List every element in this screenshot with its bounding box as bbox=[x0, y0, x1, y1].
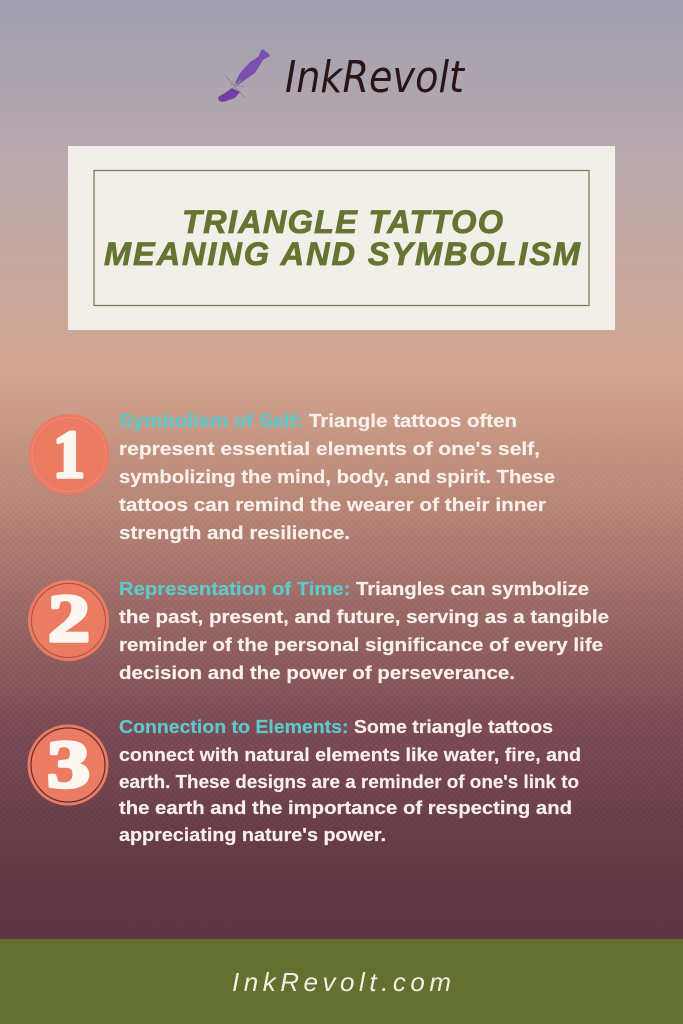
footer band bbox=[0, 939, 683, 1024]
number badge 3 bbox=[28, 724, 108, 806]
number badge 2 bbox=[28, 580, 109, 661]
text block 2: reminder of the personal significance of every life bbox=[119, 635, 603, 655]
text block 3: earth. These designs are a reminder of one's link to bbox=[119, 772, 579, 792]
text block 2 bbox=[119, 579, 609, 683]
icon: purple ink brush bbox=[218, 49, 270, 102]
footer text: InkRevolt.com bbox=[232, 967, 451, 997]
logo bbox=[218, 49, 466, 103]
text block 1: symbolizing the mind, body, and spirit. These bbox=[119, 467, 555, 487]
item 2 bbox=[28, 579, 609, 683]
item 1 bbox=[28, 411, 555, 543]
text block 1: tattoos can remind the wearer of their inner bbox=[119, 495, 546, 515]
number badge 1 bbox=[28, 414, 110, 495]
number badge 3: 3 bbox=[47, 726, 90, 802]
text block 2: the past, present, and future, serving as a tangible bbox=[119, 607, 609, 627]
logo wordmark: InkRevolt bbox=[285, 52, 466, 103]
text block 1 bbox=[119, 411, 555, 543]
text block 3: connect with natural elements like water, fire, and bbox=[119, 745, 581, 765]
title: MEANING AND SYMBOLISM bbox=[104, 236, 581, 272]
title: TRIANGLE TATTOO bbox=[182, 204, 503, 240]
text block 2: decision and the power of perseverance. bbox=[119, 663, 515, 683]
text block 3: the earth and the importance of respecting and bbox=[119, 798, 572, 818]
item 3 bbox=[28, 717, 581, 845]
text block 1: Symbolism of Self: Triangle tattoos often bbox=[119, 411, 517, 431]
text block 2: Representation of Time: Triangles can symbolize bbox=[119, 579, 589, 599]
title frame bbox=[94, 170, 589, 306]
text block 3: appreciating nature's power. bbox=[119, 825, 386, 845]
text block 1: strength and resilience. bbox=[119, 523, 350, 543]
number badge 2: 2 bbox=[48, 580, 90, 656]
title panel bbox=[68, 146, 615, 330]
text block 3: Connection to Elements: Some triangle tattoos bbox=[119, 717, 553, 737]
title bbox=[104, 204, 581, 272]
number badge 1: 1 bbox=[53, 416, 85, 492]
text block 3 bbox=[119, 717, 581, 845]
text block 1: represent essential elements of one's self, bbox=[119, 439, 540, 459]
